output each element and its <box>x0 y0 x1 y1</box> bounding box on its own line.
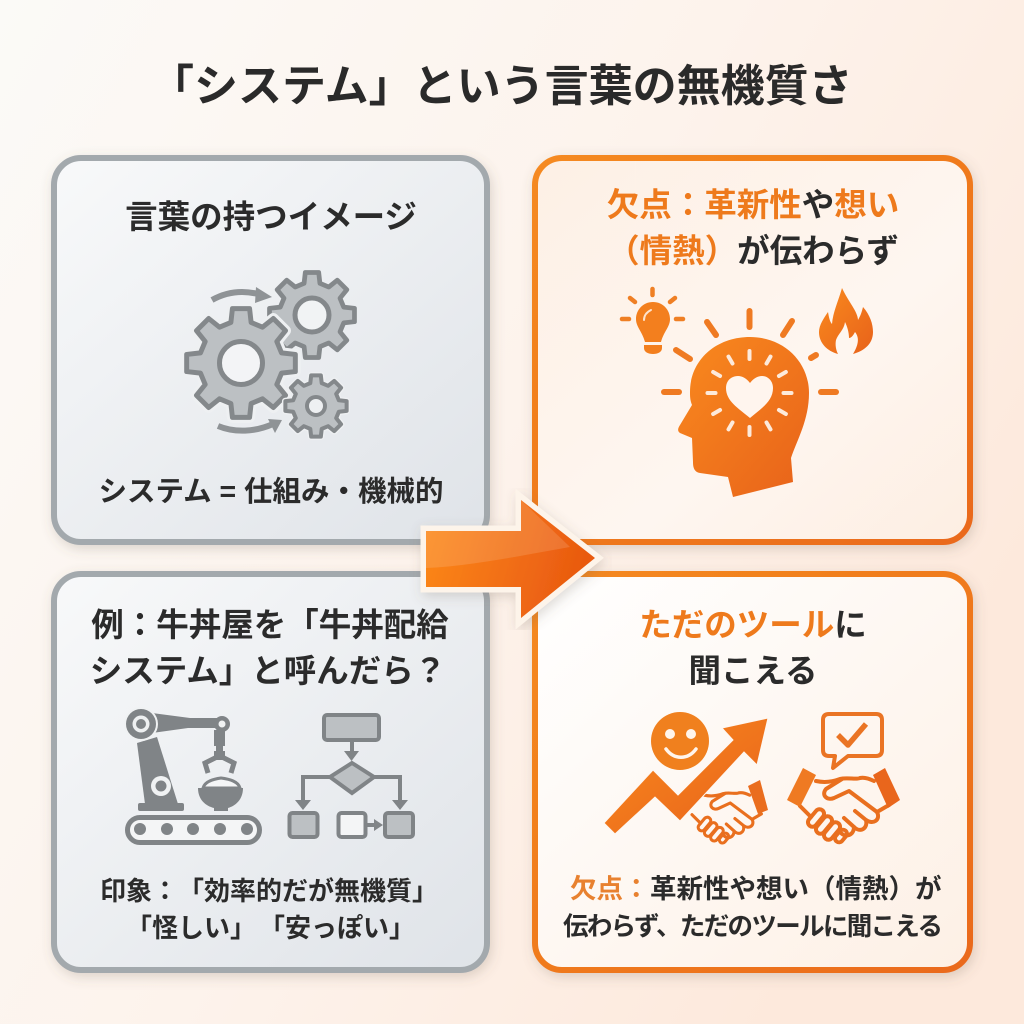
heading: just a tool: ただのツールに <box>639 607 867 643</box>
panel: shortcoming <box>535 158 970 542</box>
panel: word image <box>54 158 487 542</box>
heading: passion line: （情熱）が伝わらず <box>607 232 899 269</box>
icon: handshake with cuffs <box>787 768 900 844</box>
caption: impression: 「効率的だが無機質」 <box>178 876 438 906</box>
heading: word image: 言葉の持つイメージ <box>125 199 417 235</box>
title: 「システム」という言葉の無機質さ <box>150 62 853 111</box>
heading: shortcoming: 欠点：革新性や想い <box>607 187 899 223</box>
panel: example <box>54 574 487 970</box>
caption: system meaning: システム = 仕組み・機械的 <box>98 476 444 508</box>
caption: summary: 欠点： <box>570 874 650 904</box>
icon: head with heart <box>664 311 836 497</box>
icon: gears <box>187 273 354 437</box>
icon: rising arrow <box>604 718 768 834</box>
caption: impression line two: 「怪しい」 <box>126 913 256 943</box>
panel: just a tool <box>535 574 970 970</box>
icon: robot arm with rice bowl <box>124 707 260 842</box>
caption: impression: 印象： <box>100 876 178 906</box>
heading: example line two: システム」と呼んだら？ <box>90 653 446 689</box>
arrow: center connector <box>426 500 595 618</box>
heading: example: 例：牛丼屋を「牛丼配給 <box>91 607 449 643</box>
icon: flowchart <box>290 715 413 837</box>
heading: sounds like: 聞こえる <box>688 653 818 689</box>
caption: impression line two: 「安っぽい」 <box>259 913 415 943</box>
icon: flame <box>819 288 873 354</box>
caption: summary line two: 伝わらず、ただのツールに聞こえる <box>563 913 943 941</box>
icon: light bulb <box>622 289 683 354</box>
caption: summary: 革新性や想い（情熱）が <box>650 874 942 904</box>
icon: speech bubble with check <box>823 714 882 768</box>
icon: smiley <box>651 712 709 770</box>
icon: handshake under arrow <box>692 780 768 844</box>
